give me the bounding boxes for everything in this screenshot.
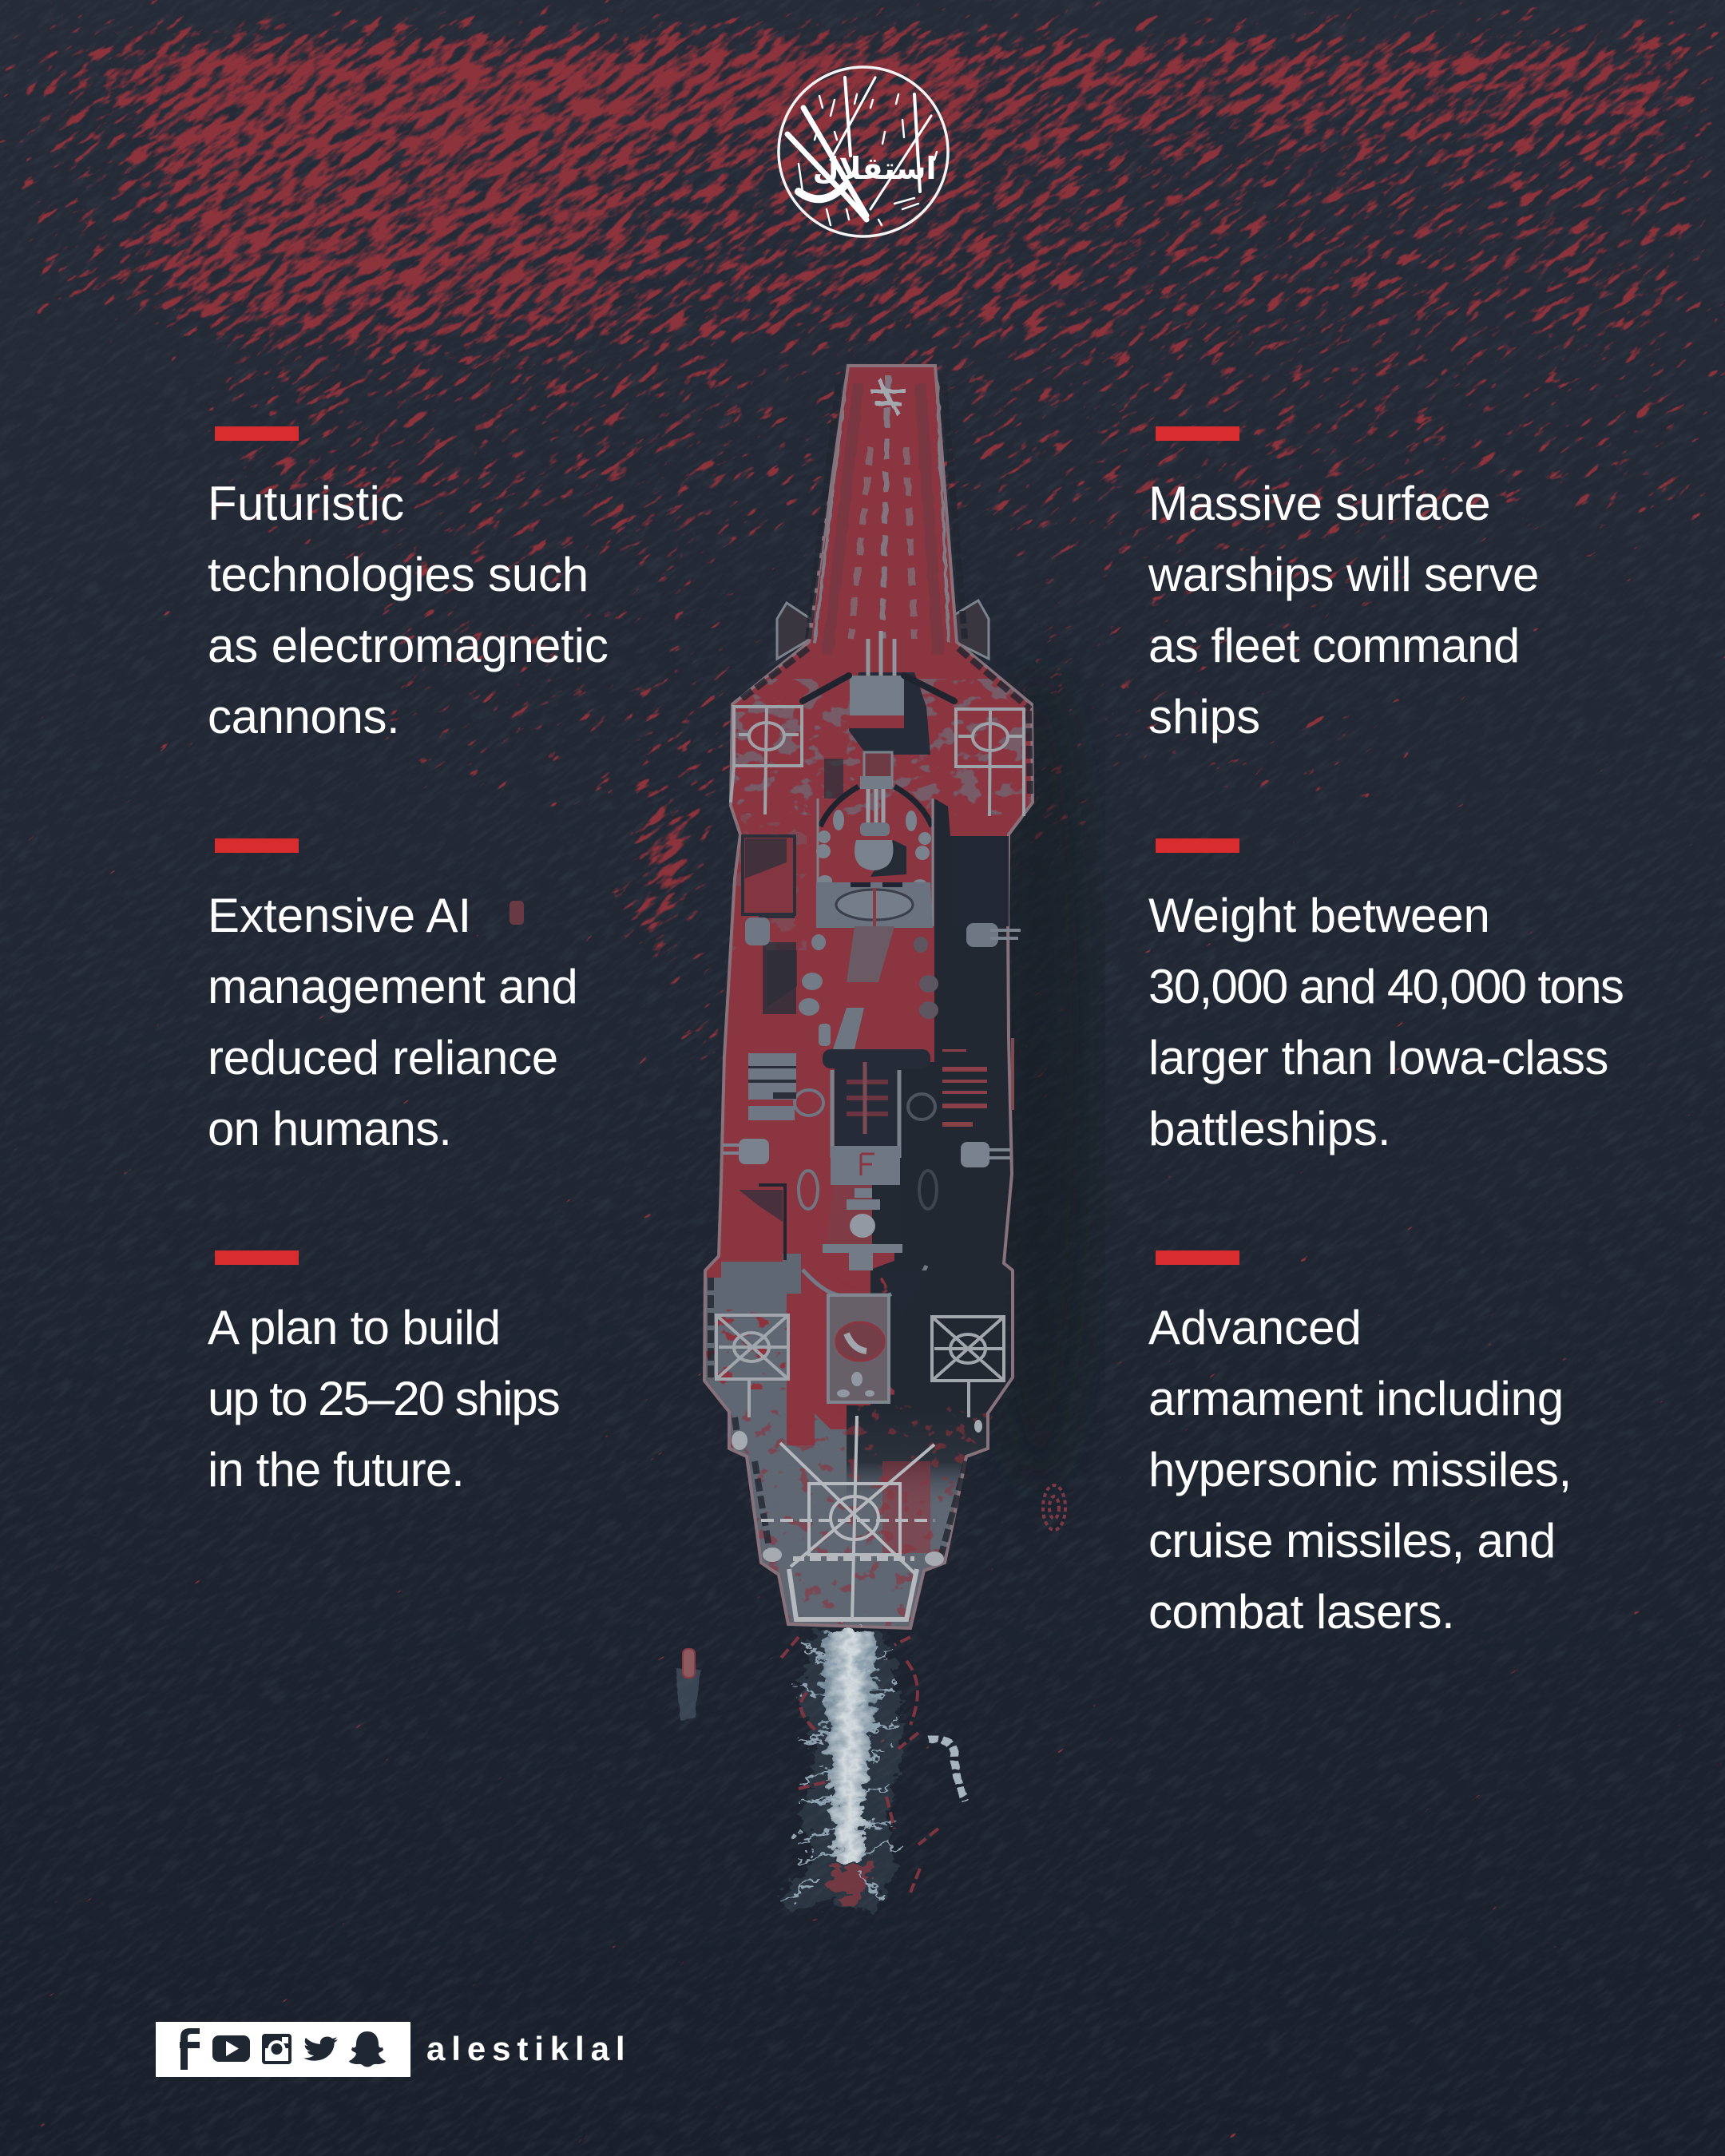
text: combat lasers. <box>1148 1585 1454 1639</box>
icon: instagram <box>262 2034 291 2064</box>
icon: youtube <box>212 2035 250 2062</box>
icon: facebook <box>180 2028 200 2070</box>
logo: calligraphic roundel: استقلال <box>812 151 937 186</box>
text: hypersonic missiles, <box>1148 1443 1572 1496</box>
panel: advanced armament <box>1148 1250 1596 1698</box>
text <box>1148 880 1623 1164</box>
text: up to 25–20 ships <box>208 1372 559 1425</box>
text: ships <box>1148 690 1260 743</box>
logo: calligraphic roundel <box>777 65 950 238</box>
deck edge dark gallery <box>711 383 1030 1557</box>
accent bar <box>215 1250 299 1265</box>
text: warships will serve <box>1148 548 1539 601</box>
text: cannons. <box>208 690 399 743</box>
ship shadow on water <box>982 663 1094 1493</box>
panel: extensive AI <box>208 838 578 1155</box>
hull outline <box>704 366 1033 1628</box>
text: Massive surface <box>1148 477 1490 530</box>
panel: futuristic technologies <box>208 426 609 743</box>
rear square helipads <box>716 1315 1004 1417</box>
small boat near left text <box>510 901 524 925</box>
footer: social icons bar <box>156 2022 410 2077</box>
text: as electromagnetic <box>208 619 609 672</box>
panel: plan to build <box>208 1250 559 1496</box>
small boat right of stern <box>1043 1485 1065 1530</box>
text <box>1148 477 1539 743</box>
icon: twitter <box>303 2036 338 2061</box>
warship <box>695 359 1038 1637</box>
right missile launchers and guns <box>942 923 1021 1167</box>
text <box>208 889 578 1155</box>
text: Advanced <box>1148 1301 1362 1354</box>
accent bar <box>1156 838 1239 853</box>
text: 30,000 and 40,000 tons <box>1148 960 1623 1013</box>
hull side sponsons <box>777 600 989 659</box>
text: battleships. <box>1148 1102 1391 1155</box>
forward superstructure <box>743 631 1009 930</box>
text <box>208 1301 559 1496</box>
ship wake <box>779 1629 966 1913</box>
text: Weight between <box>1148 889 1490 942</box>
panel: weight <box>1148 838 1644 1215</box>
text: cruise missiles, and <box>1148 1514 1556 1567</box>
text: in the future. <box>208 1443 464 1496</box>
accent bar <box>1156 1250 1239 1265</box>
text: Extensive AI <box>208 889 471 942</box>
accent bar <box>1156 426 1239 441</box>
foam streak right of wake <box>928 1739 966 1801</box>
text: management and <box>208 960 578 1013</box>
accent bar <box>215 838 299 853</box>
text <box>208 477 609 743</box>
text: reduced reliance <box>208 1031 558 1084</box>
main helipad markings <box>731 707 1024 816</box>
text: armament including <box>1148 1372 1564 1425</box>
icon: snapchat <box>349 2031 386 2067</box>
stern domes <box>732 1420 982 1566</box>
text: A plan to build <box>208 1301 500 1354</box>
text: as fleet command <box>1148 619 1520 672</box>
left missile launchers and guns <box>723 917 797 1260</box>
accent bar <box>215 426 299 441</box>
small boat left of stern <box>676 1649 701 1721</box>
central superstructure <box>795 926 938 1402</box>
stern flight deck markings <box>761 1416 934 1620</box>
text: Futuristic <box>208 477 404 530</box>
panel: massive surface warships <box>1148 426 1539 743</box>
hull deck colours <box>695 359 1038 1637</box>
bow deck stripes <box>815 375 949 655</box>
wake red edges <box>779 1637 938 1892</box>
text: larger than Iowa-class <box>1148 1031 1608 1084</box>
footer: brand name: alestiklal <box>426 2030 631 2067</box>
text <box>1148 1292 1572 1647</box>
text: technologies such <box>208 548 589 601</box>
text: on humans. <box>208 1102 451 1155</box>
